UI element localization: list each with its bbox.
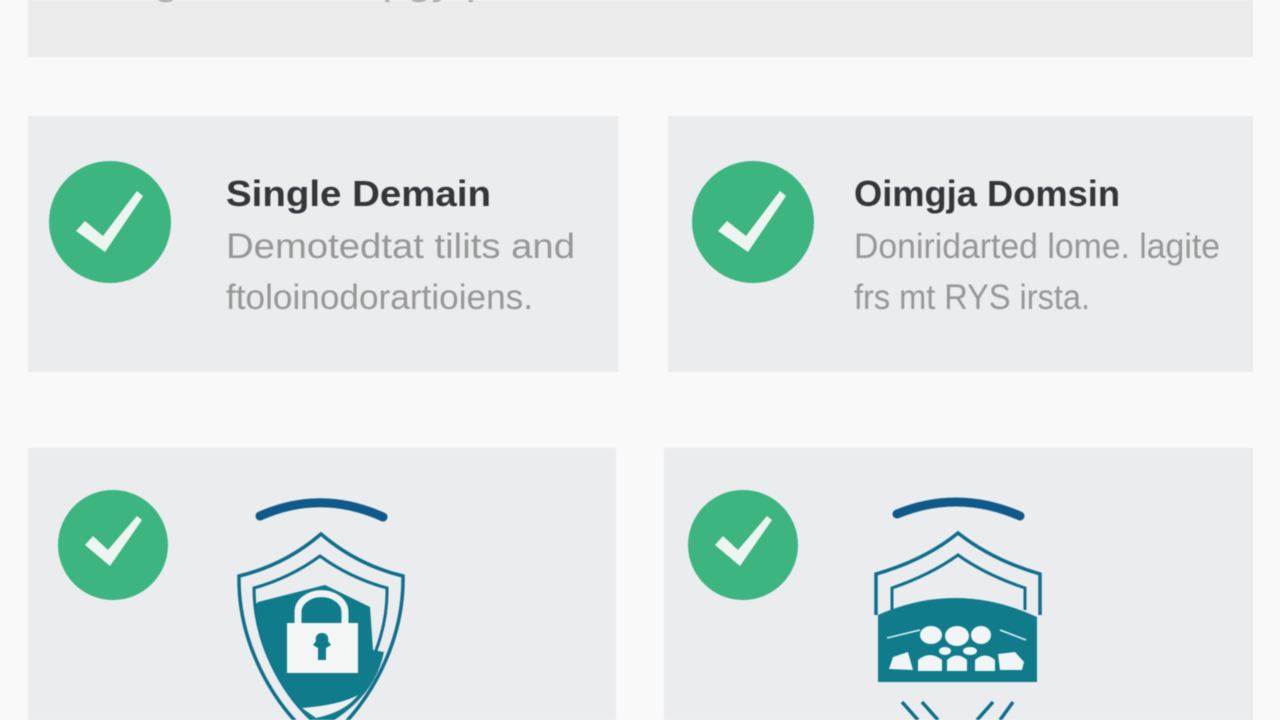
panel: top-left card <box>28 116 618 372</box>
panel: bottom-left card <box>28 448 616 720</box>
icon: green check <box>49 161 171 283</box>
card heading: Single Demain <box>226 173 491 214</box>
panel: bottom-right card <box>664 448 1253 720</box>
stones <box>887 626 1026 671</box>
padlock <box>287 594 358 673</box>
icon: shield with padlock <box>239 503 403 720</box>
arc above shield <box>260 503 383 517</box>
arc above shield <box>897 502 1020 516</box>
icon: green check <box>692 161 814 283</box>
panel: top banner <box>28 0 1253 57</box>
card body text <box>226 227 575 317</box>
card heading: Oimgja Domsin <box>854 173 1120 214</box>
card body text <box>854 227 1220 317</box>
card body text: ftoloinodorartioiens. <box>226 278 533 317</box>
chevrons below shield <box>902 702 1013 720</box>
card body text: frs mt RYS irsta. <box>854 278 1090 317</box>
icon: green check <box>688 490 798 600</box>
icon: green check <box>58 490 168 600</box>
card body text: Demotedtat tilits and <box>226 227 575 266</box>
card body text: Doniridarted lome. lagite <box>854 227 1220 266</box>
icon: shield with stones <box>876 502 1040 720</box>
panel: top-right card <box>668 116 1253 372</box>
